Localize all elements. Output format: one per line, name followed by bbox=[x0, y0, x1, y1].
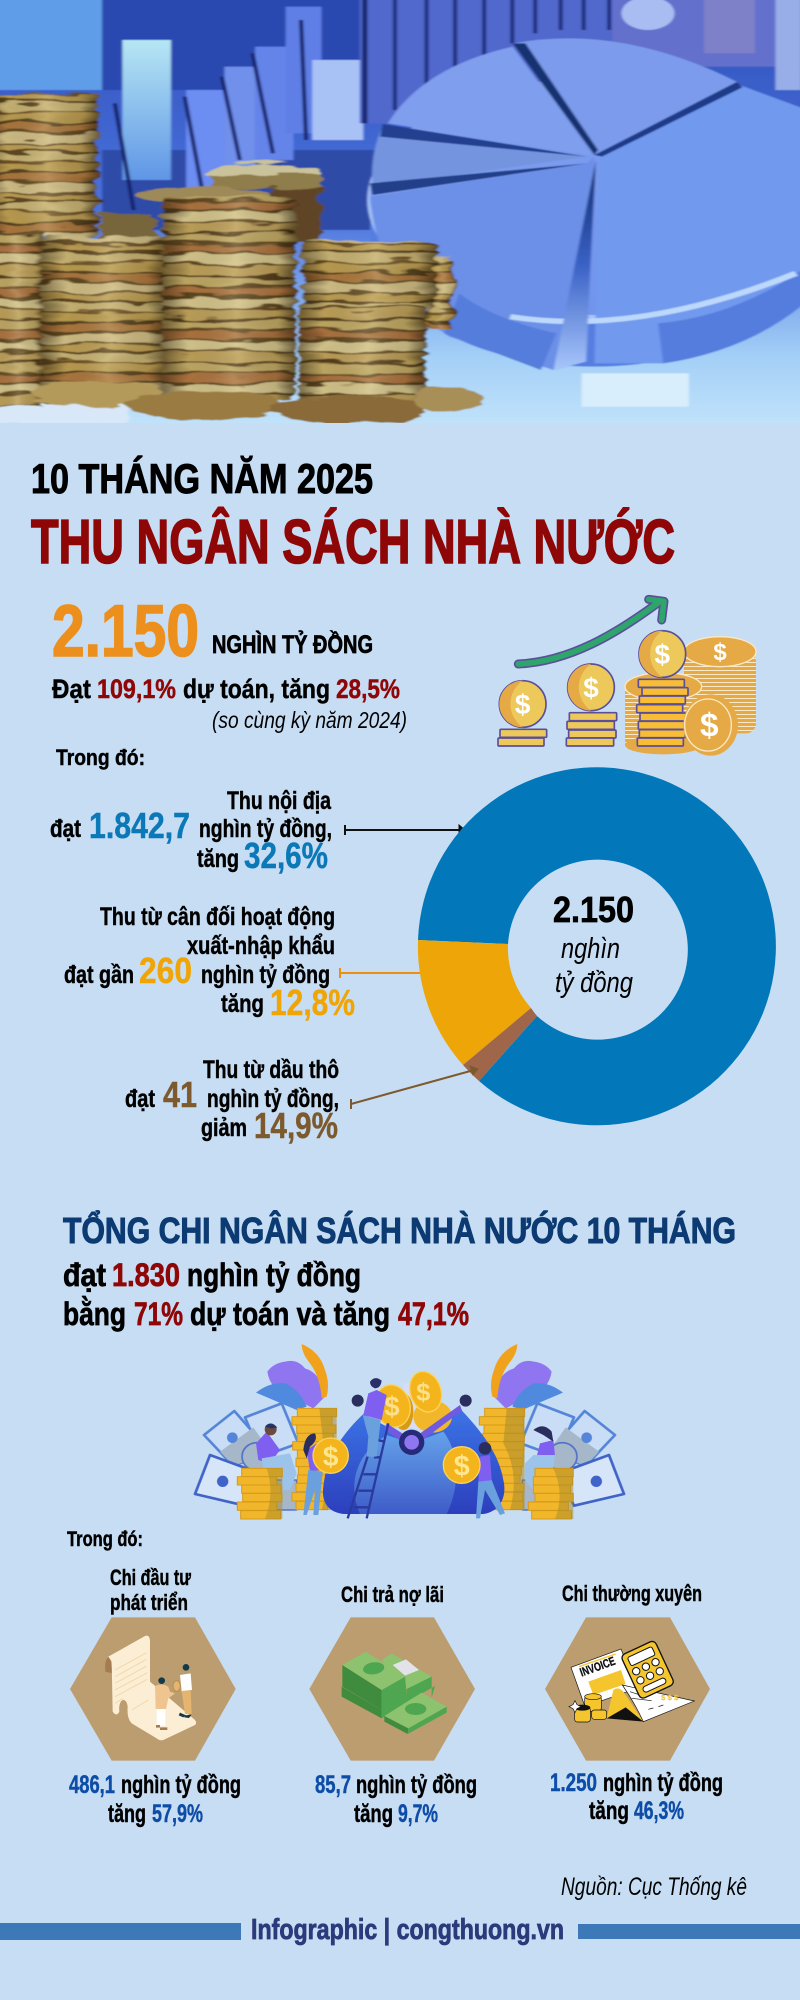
revenue comparison line: 109,1% bbox=[97, 674, 176, 704]
value: debt interest bbox=[315, 1771, 477, 1828]
revenue comparison line: Đạt bbox=[52, 674, 91, 704]
donut centre text: 2.150 bbox=[553, 889, 634, 930]
illustration: people around a money purse bbox=[195, 1344, 624, 1519]
value: regular spending: tăng bbox=[589, 1797, 629, 1825]
hero coin stacks bbox=[0, 93, 482, 425]
caption: development investment: phát triển bbox=[110, 1590, 188, 1615]
panel: regular spending bbox=[545, 1581, 723, 1825]
label: domestic revenue: Thu nội địa bbox=[227, 787, 332, 815]
icon: banknote bundles in hexagon bbox=[309, 1617, 475, 1761]
revenue comparison line bbox=[52, 674, 400, 704]
value: development investment: nghìn tỷ đồng bbox=[121, 1771, 241, 1799]
label: import-export revenue bbox=[64, 903, 355, 1023]
coin column 1 bbox=[498, 681, 547, 746]
person on ladder bbox=[363, 1378, 387, 1457]
banknotes left bbox=[195, 1403, 298, 1510]
label: crude oil revenue: Thu từ dầu thô bbox=[203, 1056, 339, 1084]
coin stack back right bbox=[479, 1408, 525, 1510]
donut segment: import-export bbox=[418, 940, 531, 1065]
value: debt interest: nghìn tỷ đồng bbox=[356, 1771, 477, 1799]
person sitting right bbox=[525, 1426, 555, 1490]
icon: invoice calculator coins in hexagon: $ $ $ bbox=[661, 1693, 678, 1702]
spending summary: nghìn tỷ đồng bbox=[187, 1257, 361, 1293]
revenue comparison line: dự toán, tăng bbox=[183, 674, 330, 704]
total revenue unit: NGHÌN TỶ ĐỒNG bbox=[212, 629, 373, 659]
big coin front: $ bbox=[700, 708, 719, 745]
donut chart: revenue breakdown bbox=[418, 767, 776, 1125]
coin stack middle bbox=[625, 673, 702, 754]
coin column 1: $ bbox=[515, 689, 531, 720]
panel: development investment bbox=[69, 1565, 241, 1828]
caption: regular spending: Chi thường xuyên bbox=[562, 1581, 702, 1606]
label: crude oil revenue: giảm bbox=[201, 1114, 247, 1142]
coins in purse: $ bbox=[384, 1391, 400, 1422]
spending summary: dự toán và tăng bbox=[190, 1296, 390, 1332]
person with coin right: $ bbox=[454, 1451, 470, 1483]
donut centre text bbox=[553, 889, 634, 999]
person with coin left bbox=[303, 1433, 348, 1515]
label: domestic revenue bbox=[50, 787, 332, 876]
subheading: of which (revenue): Trong đó: bbox=[56, 745, 145, 770]
label: import-export revenue: 260 bbox=[139, 950, 192, 991]
footer bar right bbox=[578, 1924, 800, 1939]
donut segment: crude oil bbox=[463, 1008, 537, 1081]
icon: contract and handshake in hexagon bbox=[70, 1617, 236, 1761]
value: development investment: tăng bbox=[108, 1800, 146, 1828]
value: regular spending: nghìn tỷ đồng bbox=[603, 1769, 723, 1797]
spending summary: bằng bbox=[63, 1296, 126, 1332]
label: import-export revenue: 12,8% bbox=[270, 982, 355, 1023]
coin column 3: $ bbox=[655, 639, 671, 670]
footer credit: Infographic | congthuong.vn bbox=[251, 1914, 564, 1946]
value: debt interest: tăng bbox=[354, 1800, 393, 1828]
value: regular spending: 46,3% bbox=[634, 1797, 684, 1825]
person with coin left: $ bbox=[323, 1441, 339, 1472]
coin column 2 bbox=[566, 664, 617, 746]
caption: development investment bbox=[110, 1565, 191, 1615]
label: crude oil revenue: 41 bbox=[163, 1074, 197, 1115]
hero pie chart bbox=[367, 38, 800, 407]
arrow: import-export to donut bbox=[340, 968, 431, 978]
label: crude oil revenue: nghìn tỷ đồng, bbox=[207, 1085, 339, 1113]
coin stack back left bbox=[292, 1408, 337, 1510]
arrow: growth bbox=[518, 599, 664, 664]
label: import-export revenue: nghìn tỷ đồng bbox=[201, 961, 330, 989]
arrow: crude oil to donut bbox=[351, 1066, 478, 1109]
coin column 3 bbox=[637, 631, 688, 746]
label: domestic revenue: tăng bbox=[197, 845, 239, 873]
label: domestic revenue: 1.842,7 bbox=[89, 805, 190, 846]
icon: invoice calculator coins in hexagon bbox=[545, 1617, 710, 1761]
spending summary: đạt bbox=[63, 1257, 106, 1293]
banknotes right bbox=[521, 1403, 624, 1510]
label: crude oil revenue bbox=[125, 1056, 339, 1146]
person with coin right bbox=[443, 1442, 505, 1518]
value: development investment: 486,1 bbox=[69, 1771, 115, 1799]
spending summary: 47,1% bbox=[398, 1296, 469, 1332]
label: crude oil revenue: đạt bbox=[125, 1085, 156, 1113]
hero image: coins and pie chart bbox=[0, 0, 800, 437]
total revenue value: 2.150 bbox=[52, 591, 199, 672]
coin stack front right bbox=[528, 1468, 573, 1519]
coins in purse bbox=[370, 1367, 452, 1433]
value: regular spending bbox=[550, 1769, 723, 1825]
hero bar chart backdrop bbox=[0, 0, 800, 230]
revenue comparison line: 28,5% bbox=[336, 674, 400, 704]
coin stack front left bbox=[237, 1468, 282, 1519]
person sitting left bbox=[256, 1423, 297, 1490]
donut centre text: nghìn bbox=[561, 933, 620, 965]
value: regular spending: 1.250 bbox=[550, 1769, 597, 1797]
value: development investment bbox=[69, 1771, 241, 1828]
label: domestic revenue: nghìn tỷ đồng, bbox=[199, 815, 332, 843]
spending summary: 71% bbox=[134, 1296, 183, 1332]
caption: development investment: Chi đầu tư bbox=[110, 1565, 191, 1590]
label: import-export revenue: tăng bbox=[221, 990, 264, 1018]
purse bbox=[323, 1408, 504, 1514]
arrow: domestic revenue to donut bbox=[345, 825, 465, 835]
panel: debt interest bbox=[309, 1582, 477, 1828]
label: domestic revenue: 32,6% bbox=[244, 835, 328, 876]
hero backdrop bbox=[0, 66, 800, 423]
caption: debt interest: Chi trả nợ lãi bbox=[341, 1582, 444, 1607]
value: debt interest: 9,7% bbox=[398, 1800, 438, 1828]
icon: rising coin stacks with arrow bbox=[498, 599, 756, 756]
value: debt interest: 85,7 bbox=[315, 1771, 351, 1799]
big coin front bbox=[683, 694, 738, 756]
coin column 2: $ bbox=[583, 672, 599, 703]
label: domestic revenue: đạt bbox=[50, 815, 82, 843]
label: import-export revenue: xuất-nhập khẩu bbox=[187, 932, 335, 960]
total revenue headline bbox=[52, 591, 373, 672]
label: import-export revenue: Thu từ cân đối hoạt động bbox=[100, 903, 335, 931]
ladder bbox=[348, 1423, 388, 1518]
footer bar left bbox=[0, 1923, 241, 1940]
title: period: 10 THÁNG NĂM 2025 bbox=[31, 455, 373, 502]
coins in purse: $ bbox=[416, 1379, 430, 1407]
coin stack back right: $ bbox=[713, 639, 727, 666]
leaves right bbox=[491, 1344, 563, 1410]
purse clasp bbox=[352, 1395, 472, 1455]
coin stack back right bbox=[684, 637, 756, 733]
spending summary bbox=[63, 1257, 469, 1332]
comparison note: (so cùng kỳ năm 2024) bbox=[212, 707, 407, 733]
subheading: of which (spending): Trong đó: bbox=[67, 1528, 143, 1551]
leaves left bbox=[256, 1344, 328, 1410]
label: import-export revenue: đạt gần bbox=[64, 961, 134, 989]
spending summary: 1.830 bbox=[112, 1257, 180, 1293]
donut centre text: tỷ đồng bbox=[555, 967, 633, 999]
donut segment: domestic bbox=[418, 767, 776, 1125]
value: development investment: 57,9% bbox=[152, 1800, 203, 1828]
source note: Nguồn: Cục Thống kê bbox=[561, 1873, 747, 1901]
icon: invoice calculator coins in hexagon: INVOICE bbox=[578, 1654, 617, 1679]
label: crude oil revenue: 14,9% bbox=[254, 1105, 338, 1146]
